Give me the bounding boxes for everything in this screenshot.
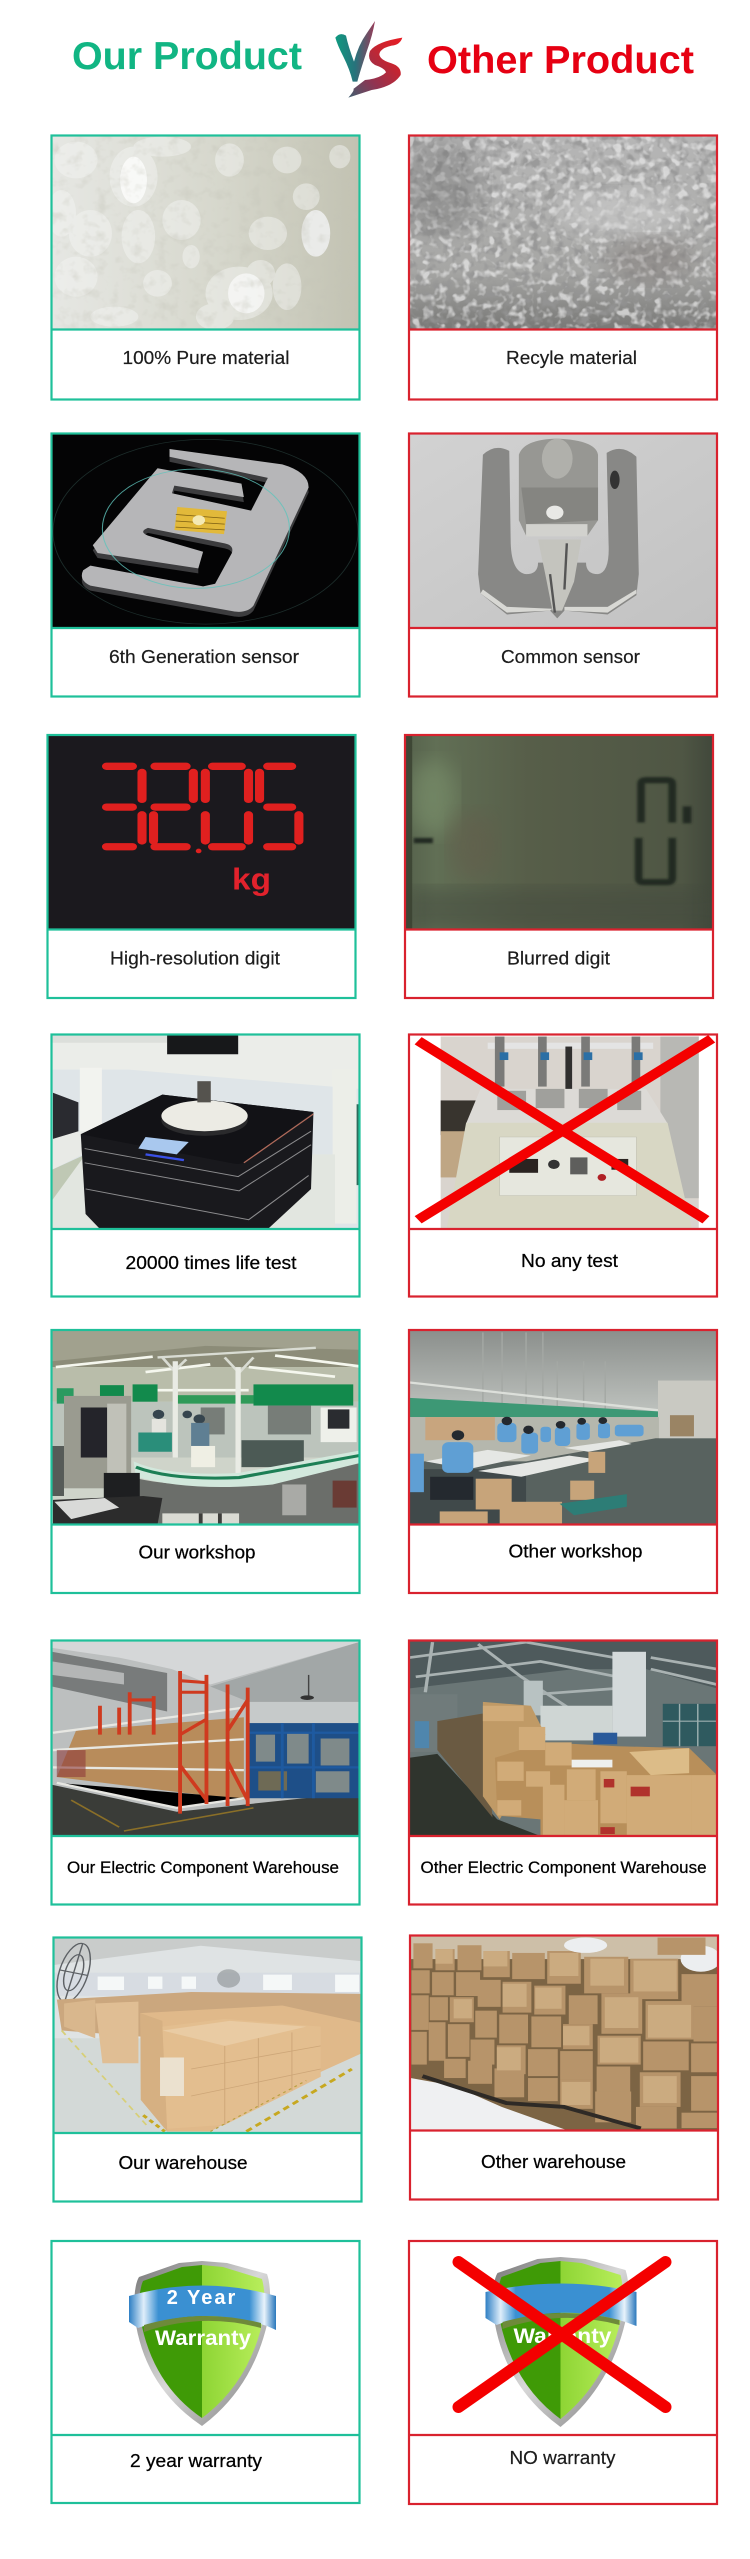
card: recycled material [397, 136, 718, 400]
photo: scales under test press [52, 1036, 358, 1228]
photo: common metal sensor [410, 434, 716, 627]
card: 100% pure material [47, 136, 360, 400]
caption: NO warranty [510, 2447, 616, 2468]
shield label: Warranty: Warranty [155, 2327, 251, 2350]
LED unit: kg [232, 862, 271, 896]
card: other electric component warehouse [408, 1640, 718, 1904]
caption: Common sensor [501, 646, 640, 667]
caption: High-resolution digit [110, 948, 280, 968]
caption: 2 year warranty [130, 2450, 263, 2471]
card frame [404, 735, 714, 998]
photo: blurry LCD [406, 736, 712, 928]
card frame [408, 434, 718, 696]
photo: racks with boxes [52, 1642, 358, 1835]
card frame [53, 1938, 362, 2202]
photo: unsorted boxes [410, 1642, 716, 1835]
caption: Recyle material [506, 347, 637, 368]
card frame [408, 2241, 718, 2504]
caption: Other Electric Component Warehouse [420, 1858, 706, 1877]
photo: red LED display [48, 736, 354, 928]
caption: Blurred digit [507, 948, 610, 968]
photo: S-shaped sensor on black [52, 434, 358, 627]
photo: grey granules [410, 136, 716, 328]
photo: damaged cartons [411, 1936, 717, 2130]
card: no warranty [408, 2241, 718, 2504]
caption: 100% Pure material [122, 347, 290, 368]
card frame [51, 434, 360, 696]
header [72, 21, 694, 98]
photo: clean workshop [52, 1331, 358, 1524]
card: other workshop [408, 1330, 718, 1593]
heading: Other Product: Other Product [427, 39, 694, 82]
photo: crossed-out test machine [414, 1036, 716, 1228]
card frame [51, 136, 360, 400]
card: blurred digit [404, 735, 714, 998]
caption: Other warehouse [481, 2151, 626, 2172]
card: our electric component warehouse [51, 1640, 360, 1904]
card frame [408, 1640, 718, 1904]
caption: Our warehouse [118, 2152, 248, 2173]
card frame [408, 136, 718, 400]
icon: VS logo [335, 21, 402, 98]
card frame [408, 1330, 718, 1593]
card frame [47, 735, 356, 998]
card: 6th generation sensor [51, 434, 360, 696]
caption: 6th Generation sensor [109, 646, 299, 667]
card frame [410, 1936, 718, 2200]
card frame [51, 1330, 360, 1593]
card: other warehouse [410, 1936, 721, 2200]
card frame [51, 1640, 360, 1904]
card: high-resolution digit [47, 735, 356, 998]
heading: Our Product: Our Product [72, 35, 302, 78]
caption: 20000 times life test [126, 1252, 296, 1273]
icon: crossed-out shield [458, 2257, 666, 2427]
caption: No any test [521, 1250, 618, 1271]
card frame [408, 1034, 718, 1296]
shield label: Warranty: Warranty [514, 2325, 612, 2348]
caption: Other workshop [508, 1540, 642, 1562]
card: no any test [408, 1034, 718, 1296]
red cross [458, 2262, 666, 2407]
card: 20000 times life test [51, 1034, 360, 1296]
card frame [51, 1034, 360, 1296]
card: 2 year warranty [51, 2241, 360, 2503]
card: common sensor [408, 434, 718, 696]
photo: crowded workshop [410, 1331, 716, 1524]
card: our warehouse [51, 1938, 362, 2202]
caption: Our workshop [138, 1542, 256, 1562]
photo: clear pellets [52, 136, 358, 328]
photo: orderly warehouse [54, 1938, 360, 2132]
icon: green warranty shield [129, 2261, 276, 2426]
shield label: 2 Year: 2 Year [167, 2287, 237, 2309]
card: our workshop [51, 1330, 360, 1593]
caption: Our Electric Component Warehouse [67, 1858, 339, 1877]
card frame [51, 2241, 360, 2503]
